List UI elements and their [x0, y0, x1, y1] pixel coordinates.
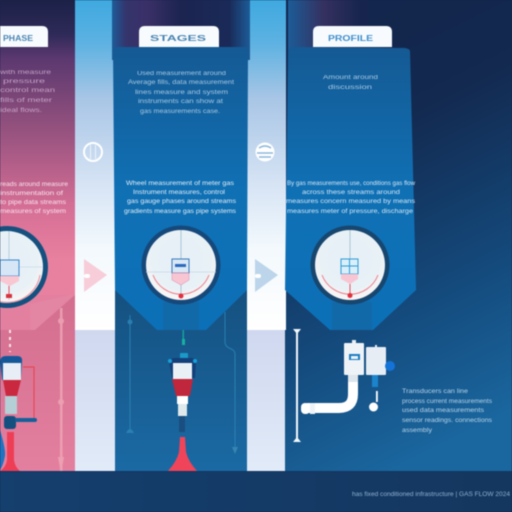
text block: left upper: pressure [3, 79, 46, 85]
text block: lower right note: used data measurements [402, 408, 484, 414]
icon: left gap circle [84, 143, 102, 161]
text block: middle upper [128, 71, 234, 115]
text block: middle upper: instruments can show at [138, 99, 223, 105]
text block: right lower: measures meter of pressure, discharge [287, 209, 414, 215]
icon: right gap circle [256, 142, 274, 162]
text block: right lower: By gas measurements use, conditions gas flow [287, 181, 416, 187]
tab: right heading [313, 26, 392, 47]
footer bar [0, 471, 512, 512]
tab: right heading: PROFILE [328, 34, 374, 43]
tab: left heading: PHASE [3, 34, 34, 43]
panel: first light gap column [75, 0, 115, 471]
text block: left upper: fills of meter [0, 98, 52, 104]
panel: second light gap column [247, 0, 286, 471]
text block: middle upper: gas measurements case. [140, 109, 220, 115]
text block: right upper [323, 75, 378, 91]
text block: right lower: measures concern measured by means [286, 199, 415, 205]
arrow: left [84, 259, 107, 292]
text block: middle upper: Average fills, data measurement [128, 80, 234, 86]
text block: middle upper: Used measurement around [137, 71, 226, 77]
text block: lower right note: Transducers can line [402, 389, 469, 395]
text block: left middle [0, 182, 69, 215]
text block: lower right note: assembly [402, 428, 432, 434]
tab: left heading [0, 26, 48, 47]
text block: middle lower: gas gauge phases around streams [127, 199, 236, 205]
icon: left meter stand [0, 330, 37, 471]
text block: right lower: across these streams around [302, 190, 400, 196]
gauge: left [0, 226, 48, 308]
tab: middle heading: STAGES [150, 34, 207, 43]
text block: left middle: measures of system [0, 209, 66, 215]
text block: left upper: with measure [0, 70, 52, 76]
footer text: has fixed conditioned infrastructure | GAS FLOW 2024 [352, 492, 511, 498]
panel: right blue column [285, 0, 416, 330]
tab: middle heading [139, 26, 219, 47]
text block: middle lower: Wheel measurement of meter gas [126, 181, 234, 187]
text block: middle lower: gradients measure gas pipe systems [124, 209, 236, 215]
panel: middle blue column [112, 0, 250, 471]
text block: left middle: reads around measure [0, 182, 69, 188]
gauge: middle [142, 226, 220, 304]
guide lines: middle column [126, 312, 238, 454]
icon: right fitting assembly [293, 329, 395, 442]
panel: left pink column [0, 0, 75, 471]
text block: left middle: instrumentation of [0, 191, 63, 197]
text block: right upper: discussion [328, 85, 372, 91]
text block: left upper: control mean [0, 88, 55, 94]
text block: middle lower [124, 181, 236, 215]
icon: middle meter stand [168, 330, 197, 471]
text block: lower right note: process current measurements [402, 399, 492, 405]
text block: left upper [0, 70, 55, 114]
text block: left middle: to pipe data streams [0, 200, 66, 206]
text block: middle lower: Instrument measures, control [133, 190, 225, 196]
text block: left upper: ideal flows. [0, 108, 42, 114]
arrow: right [255, 259, 278, 292]
text block: right upper: Amount around [323, 75, 378, 81]
text block: middle upper: lines measure and system [135, 90, 228, 96]
gauge: right [310, 226, 390, 304]
text block: right lower [286, 181, 416, 215]
guide line: left column [58, 308, 64, 471]
text block: lower right note: sensor readings. connections [402, 418, 492, 424]
text block: lower right note [402, 389, 492, 434]
